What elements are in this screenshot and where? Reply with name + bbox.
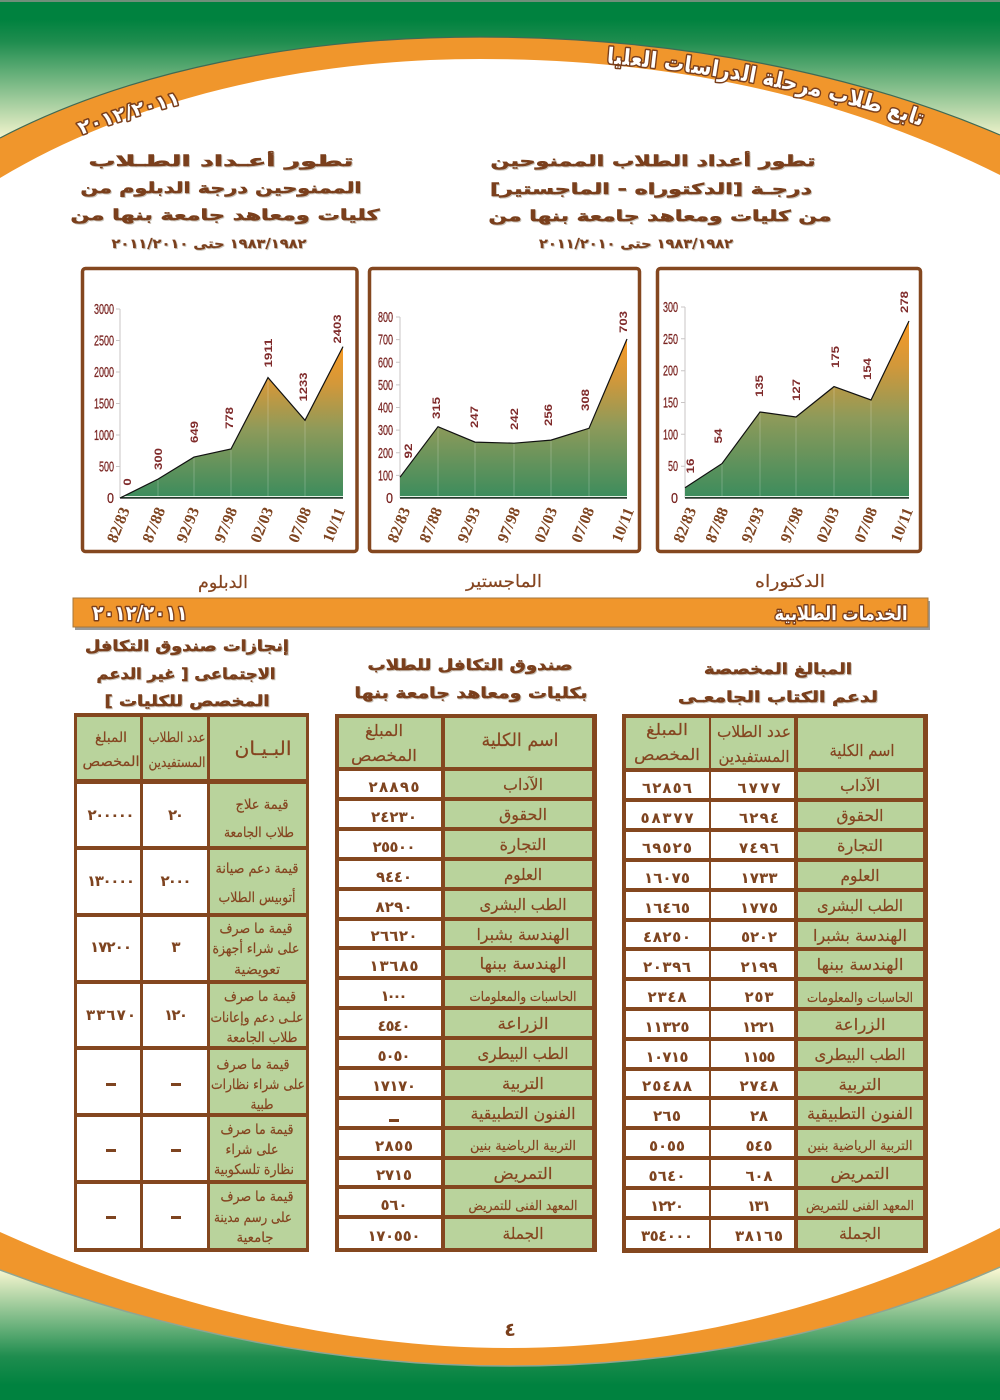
chart: masters: 308 — [580, 389, 592, 411]
heading: diploma: كليات ومعاهد جامعة بنها من — [70, 206, 380, 224]
row: university city fee — [77, 1184, 306, 1248]
row: veterinary — [339, 1040, 592, 1066]
row: student support — [77, 984, 306, 1046]
chart: masters: 92 — [403, 444, 415, 458]
row: arts: الآداب — [840, 776, 880, 795]
chart: doctorate: 250 — [663, 331, 678, 348]
row: telescope: نظارة تلسكوبية — [214, 1162, 294, 1178]
row: shubra engineering: ٤٨٢٥٠ — [643, 928, 691, 946]
row: physical education: التربية الرياضية بنين — [470, 1139, 576, 1154]
row: benha engineering: ٢١٩٩ — [740, 958, 778, 976]
row: physical education: ٥٠٥٥ — [649, 1137, 685, 1155]
row: commerce: ٧٤٩٦ — [739, 839, 779, 857]
row: commerce — [626, 832, 923, 858]
row: bus maintenance: ١٣٠٠٠٠ — [87, 872, 135, 890]
bottom banner — [0, 1228, 1000, 1400]
page number: ٤ — [504, 1319, 516, 1341]
table: fund achievements — [74, 713, 309, 1252]
row: nursing: ٢٧١٥ — [376, 1166, 412, 1184]
table title: fund achievements: إنجازات صندوق التكافل — [85, 637, 289, 655]
table: solidarity fund — [335, 714, 597, 1252]
green gradient band — [0, 0, 1000, 138]
row: student support: قيمة ما صرف — [224, 989, 296, 1005]
row: nursing institute: ١٢٢٠ — [650, 1197, 684, 1215]
chart: doctorate: 135 — [754, 375, 766, 397]
banner title: تابع طلاب مرحلة الدراسات العليا — [607, 45, 925, 126]
row: commerce: ٢٥٥٠٠ — [372, 838, 416, 856]
row: replacement devices: ١٧٢٠٠ — [90, 938, 132, 956]
row: computing: ٢٥٣ — [744, 988, 774, 1006]
row: benha engineering: الهندسة ببنها — [816, 955, 904, 975]
chart caption: diploma: الدبلوم — [198, 573, 248, 593]
row: computing: ٢٣٤٨ — [648, 988, 686, 1006]
row: shubra engineering — [626, 922, 923, 947]
chart: masters: 800 — [378, 309, 393, 326]
heading: postgraduate degrees: درجـة [الدكتوراه - الماجستير] — [490, 180, 812, 198]
row: medical glasses: طبية — [250, 1097, 274, 1113]
row: physical education: التربية الرياضية بنين — [808, 1139, 912, 1154]
row: education: ٢٧٤٨ — [740, 1077, 778, 1095]
chart: diploma: 1911 — [263, 338, 275, 368]
row: total: الجملة — [502, 1224, 544, 1243]
chart: doctorate: 02/03 — [814, 505, 843, 545]
row: medical glasses — [77, 1050, 306, 1113]
header row: اسم الكلية — [482, 730, 558, 751]
row: benha engineering: ١٣٦٨٥ — [370, 957, 418, 975]
row: medicine: ١٦٤٦٥ — [644, 899, 690, 917]
chart: doctorate: 175 — [830, 346, 842, 368]
row: benha engineering — [626, 951, 923, 977]
header row: المستفيدين — [148, 755, 206, 771]
row: education: التربية — [838, 1075, 882, 1095]
green gradient band — [0, 1267, 1000, 1400]
row: student support: ٣٣٦٧٠ — [86, 1006, 136, 1024]
row: arts: الآداب — [503, 775, 543, 794]
row: medicine: ٨٢٩٠ — [376, 898, 412, 916]
chart: doctorate: 54 — [713, 427, 725, 444]
header row: المخصص — [634, 745, 700, 765]
chart: doctorate: 10/11 — [888, 506, 917, 545]
row: shubra engineering: ٢٦٦٢٠ — [370, 927, 418, 945]
row: nursing institute: ٥٦٠ — [380, 1196, 408, 1214]
row: veterinary: الطب البيطرى — [478, 1044, 568, 1064]
row: university city fee: جامعية — [236, 1230, 274, 1246]
row: nursing — [339, 1160, 592, 1185]
chart: diploma: 02/03 — [248, 505, 277, 545]
row: treatment — [77, 784, 306, 846]
chart: doctorate — [658, 268, 920, 552]
row: bus maintenance — [77, 850, 306, 913]
row: science — [626, 862, 923, 888]
header row: عدد الطلاب — [717, 722, 791, 741]
row: replacement devices: على شراء أجهزة — [212, 939, 300, 957]
row: university city fee: قيمة ما صرف — [220, 1189, 294, 1205]
row: telescope: على شراء — [226, 1142, 278, 1158]
chart: masters: 300 — [378, 422, 393, 439]
chart: diploma: 92/93 — [174, 505, 203, 545]
table: book support — [622, 714, 928, 1253]
chart: masters: 600 — [378, 354, 393, 371]
chart: doctorate: 92/93 — [739, 505, 768, 545]
row: medicine — [626, 892, 923, 918]
row: computing: ١٠٠٠ — [380, 987, 408, 1005]
chart caption: doctorate: الدكتوراه — [755, 572, 825, 592]
row: university city fee: على رسم مدينة — [214, 1210, 292, 1226]
chart: diploma: 649 — [189, 421, 201, 443]
header row — [77, 717, 306, 779]
row: applied arts — [339, 1100, 592, 1126]
row: medicine: الطب البشرى — [817, 896, 903, 916]
row: medical glasses: قيمة ما صرف — [216, 1057, 290, 1073]
row: law: ٢٤٢٣٠ — [371, 808, 417, 826]
row: education: ٢٥٤٨٨ — [642, 1077, 692, 1095]
row: physical education — [626, 1130, 923, 1156]
chart: masters: 97/98 — [495, 505, 524, 545]
row: shubra engineering: ٥٢٠٢ — [741, 928, 777, 946]
row: total: ٣٨١٦٥ — [735, 1227, 783, 1245]
row: nursing — [626, 1160, 923, 1186]
chart: masters: 100 — [378, 467, 393, 484]
chart: masters — [370, 268, 640, 552]
row: student support: ١٢٠ — [164, 1006, 188, 1024]
row: applied arts: ٢٨ — [750, 1107, 768, 1125]
header row — [339, 718, 592, 767]
row: science: العلوم — [504, 865, 542, 885]
row: telescope: قيمة ما صرف — [220, 1122, 294, 1138]
row: education: ١٧١٧٠ — [372, 1077, 416, 1095]
row: nursing institute — [339, 1189, 592, 1215]
chart: diploma: 1233 — [298, 372, 310, 402]
chart: masters: 82/83 — [385, 505, 414, 545]
row: applied arts — [626, 1100, 923, 1126]
row: replacement devices — [77, 917, 306, 980]
chart: masters: 87/88 — [417, 505, 446, 545]
section bar: student services: ٢٠١٢/٢٠١١ — [92, 601, 188, 625]
chart: masters: 07/08 — [569, 505, 598, 545]
chart: diploma — [82, 268, 357, 552]
chart: doctorate: 82/83 — [671, 505, 700, 545]
row: commerce: التجارة — [500, 835, 546, 855]
chart: masters: 10/11 — [609, 506, 638, 545]
chart: doctorate: 0 — [671, 490, 678, 507]
banner year: ٢٠١٢/٢٠١١ — [75, 92, 180, 136]
row: shubra engineering: الهندسة بشبرا — [813, 926, 907, 946]
heading: postgraduate degrees: من كليات ومعاهد جامعة بنها من — [488, 207, 832, 225]
chart: diploma: 2500 — [94, 332, 114, 350]
row: shubra engineering: الهندسة بشبرا — [476, 925, 570, 945]
chart: diploma: 0 — [122, 478, 134, 486]
row: treatment: قيمة علاج — [236, 797, 288, 813]
chart: diploma: 0 — [107, 490, 114, 507]
row: computing — [626, 981, 923, 1007]
row: total — [626, 1220, 923, 1248]
row: medical glasses: على شراء نظارات — [211, 1077, 305, 1093]
chart: masters: 242 — [509, 408, 521, 430]
row: law — [626, 802, 923, 828]
row: benha engineering: الهندسة ببنها — [480, 954, 566, 974]
header row: اسم الكلية — [830, 741, 894, 760]
heading: postgraduate degrees: ١٩٨٣/١٩٨٢ حتى ٢٠١١/٢٠١٠ — [539, 237, 733, 252]
chart: masters: 247 — [469, 406, 481, 428]
row: science: العلوم — [840, 866, 880, 886]
row: shubra engineering — [339, 921, 592, 946]
chart: masters: 703 — [618, 311, 630, 333]
chart: doctorate: 50 — [668, 458, 678, 475]
chart: diploma: 1500 — [94, 396, 114, 412]
row: law: ٦٢٩٤ — [739, 809, 779, 827]
row: treatment: ٢٠٠٠٠٠ — [88, 806, 134, 824]
chart: diploma: 1000 — [94, 427, 114, 444]
row: agriculture — [626, 1011, 923, 1037]
heading: diploma: تطور أعـداد الطـلاب — [88, 151, 354, 170]
row: computing: الحاسبات والمعلومات — [470, 990, 576, 1005]
heading: postgraduate degrees — [488, 151, 832, 252]
row: arts: ٢٨٨٩٥ — [368, 778, 420, 796]
chart: doctorate: 278 — [899, 291, 911, 313]
row: benha engineering — [339, 950, 592, 976]
row: law: ٥٨٣٧٧ — [640, 809, 694, 827]
chart: masters: 500 — [378, 377, 393, 394]
row: benha engineering: ٢٠٣٩٦ — [643, 958, 691, 976]
row: commerce — [339, 831, 592, 857]
row: physical education: ٥٤٥ — [746, 1137, 772, 1155]
header row: المخصص — [82, 754, 140, 770]
row: replacement devices: ٣ — [171, 938, 181, 956]
row: veterinary: ١٠٧١٥ — [646, 1048, 688, 1066]
heading: diploma: ١٩٨٣/١٩٨٢ حتى ٢٠١١/٢٠١٠ — [112, 237, 307, 252]
chart: diploma: 87/88 — [140, 505, 169, 545]
table title: book support: المبالغ المخصصة — [704, 660, 852, 678]
row: commerce: التجارة — [837, 836, 883, 856]
orange arc — [0, 37, 1000, 178]
chart: diploma: 97/98 — [212, 505, 241, 545]
row: agriculture: ١١٣٢٥ — [644, 1018, 690, 1036]
table title: book support: لدعم الكتاب الجامعـى — [678, 688, 878, 706]
chart: masters: 700 — [378, 332, 393, 349]
chart: diploma: 2000 — [94, 364, 114, 381]
row: bus maintenance: قيمة دعم صيانة — [216, 861, 298, 877]
table title: solidarity fund: بكليات ومعاهد جامعة بنها — [354, 684, 588, 702]
row: arts — [339, 771, 592, 797]
row: science: ١٧٣٣ — [740, 869, 778, 887]
row: nursing: ٦٠٨ — [746, 1167, 772, 1185]
row: arts: ٦٧٧٧ — [738, 779, 780, 797]
row: nursing institute: ١٣١ — [747, 1197, 771, 1215]
row: commerce: ٦٩٥٢٥ — [642, 839, 692, 857]
header row: المخصص — [351, 746, 417, 766]
chart caption: masters: الماجستير — [465, 572, 542, 592]
table title: fund achievements — [85, 637, 289, 710]
row: treatment: ٢٠ — [168, 806, 184, 824]
chart: diploma: 07/08 — [286, 505, 315, 545]
row: replacement devices: قيمة ما صرف — [220, 921, 292, 937]
chart: diploma: 82/83 — [104, 505, 134, 545]
orange arc — [0, 1228, 1000, 1366]
row: law: الحقوق — [836, 806, 884, 826]
row: agriculture: الزراعة — [834, 1015, 886, 1035]
chart: masters: 256 — [543, 404, 555, 426]
chart: masters: 0 — [386, 490, 393, 507]
heading: diploma — [70, 151, 380, 252]
header row — [626, 718, 923, 768]
chart: diploma: 500 — [99, 458, 114, 476]
chart: diploma: 300 — [153, 448, 165, 470]
top banner — [0, 0, 1000, 178]
row: medicine: الطب البشرى — [480, 895, 566, 915]
chart: doctorate: 97/98 — [778, 505, 807, 545]
row: agriculture — [339, 1010, 592, 1036]
row: telescope — [77, 1117, 306, 1180]
row: law: الحقوق — [499, 805, 547, 825]
section bar: student services — [73, 598, 930, 630]
row: education: التربية — [502, 1074, 544, 1094]
row: agriculture: ١٢٢١ — [742, 1018, 776, 1036]
row: physical education — [339, 1130, 592, 1156]
row: veterinary — [626, 1041, 923, 1067]
row: nursing: التمريض — [494, 1164, 552, 1184]
row: education — [339, 1070, 592, 1096]
row: science: ١٦٠٧٥ — [644, 869, 690, 887]
row: treatment: طلاب الجامعة — [224, 825, 294, 841]
row: total: الجملة — [839, 1224, 881, 1243]
row: total: ١٧٠٥٥٠ — [368, 1227, 420, 1245]
row: applied arts: الفنون التطبيقية — [470, 1104, 576, 1124]
row: bus maintenance: أتوبيس الطلاب — [218, 888, 296, 906]
row: total — [339, 1219, 592, 1248]
row: nursing institute: المعهد الفنى للتمريض — [468, 1199, 578, 1214]
chart: doctorate: 150 — [663, 394, 678, 412]
row: nursing: التمريض — [830, 1164, 890, 1184]
header row: المستفيدين — [718, 747, 790, 767]
row: veterinary: ٥٠٥٠ — [378, 1047, 410, 1065]
table title: fund achievements: الاجتماعى [ غير الدعم — [96, 665, 276, 683]
row: nursing institute: المعهد الفنى للتمريض — [806, 1199, 914, 1214]
chart: masters: 02/03 — [532, 505, 561, 545]
chart: doctorate: 300 — [663, 299, 678, 316]
row: veterinary: ١١٥٥ — [742, 1048, 776, 1066]
chart: masters: 315 — [431, 397, 443, 419]
row: bus maintenance: ٢٠٠٠ — [160, 872, 192, 890]
row: computing: الحاسبات والمعلومات — [807, 991, 913, 1006]
chart: diploma: 2403 — [332, 314, 344, 344]
chart: diploma: 778 — [224, 407, 236, 429]
row: medicine — [339, 891, 592, 917]
chart: doctorate: 154 — [862, 357, 874, 380]
row: medicine: ١٧٧٥ — [740, 899, 778, 917]
row: total: ٣٥٤٠٠٠ — [641, 1227, 693, 1245]
chart: masters: 92/93 — [455, 505, 484, 545]
chart: diploma: 3000 — [94, 301, 114, 318]
row: arts: ٦٢٨٥٦ — [642, 779, 692, 797]
chart: doctorate: 07/08 — [852, 505, 881, 545]
row: student support: طلاب الجامعة — [226, 1030, 298, 1046]
row: agriculture: ٤٥٤٠ — [378, 1017, 410, 1035]
section bar: student services: الخدمات الطلابية — [774, 603, 908, 625]
chart: diploma: 10/11 — [320, 506, 349, 545]
header row: المبلغ — [365, 721, 403, 741]
heading: diploma: الممنوحين درجة الدبلوم من — [80, 179, 362, 197]
chart: doctorate: 127 — [791, 379, 803, 401]
row: replacement devices: تعويضية — [234, 962, 280, 978]
row: nursing institute — [626, 1190, 923, 1216]
row: applied arts: ٢٦٥ — [653, 1107, 681, 1125]
header row: عدد الطلاب — [148, 730, 206, 746]
header row: المبلغ — [95, 730, 127, 746]
row: physical education: ٢٨٥٥ — [375, 1137, 413, 1155]
row: agriculture: الزراعة — [498, 1014, 548, 1034]
chart: doctorate: 100 — [663, 426, 678, 443]
table title: solidarity fund: صندوق التكافل للطلاب — [368, 656, 572, 674]
chart: doctorate: 87/88 — [703, 505, 732, 545]
chart: doctorate: 16 — [685, 458, 697, 474]
table title: solidarity fund — [354, 656, 588, 702]
row: education — [626, 1071, 923, 1096]
row: science — [339, 861, 592, 887]
row: law — [339, 801, 592, 827]
header row: البـيـان — [234, 738, 292, 760]
chart: doctorate: 200 — [663, 363, 678, 380]
row: student support: علـى دعم وإعانات — [210, 1010, 304, 1026]
row: nursing: ٥٦٤٠ — [648, 1167, 686, 1185]
table title: fund achievements: المخصص للكليات ] — [104, 692, 270, 710]
row: computing — [339, 980, 592, 1006]
header row: المبلغ — [646, 720, 688, 740]
heading: postgraduate degrees: تطور أعداد الطلاب الممنوحين — [490, 151, 816, 170]
table title: book support — [678, 660, 878, 706]
row: arts — [626, 772, 923, 798]
chart: masters: 200 — [378, 445, 393, 462]
row: science: ٩٤٤٠ — [376, 868, 412, 886]
row: veterinary: الطب البيطرى — [814, 1045, 906, 1065]
row: applied arts: الفنون التطبيقية — [807, 1104, 913, 1124]
chart: masters: 400 — [378, 400, 393, 416]
